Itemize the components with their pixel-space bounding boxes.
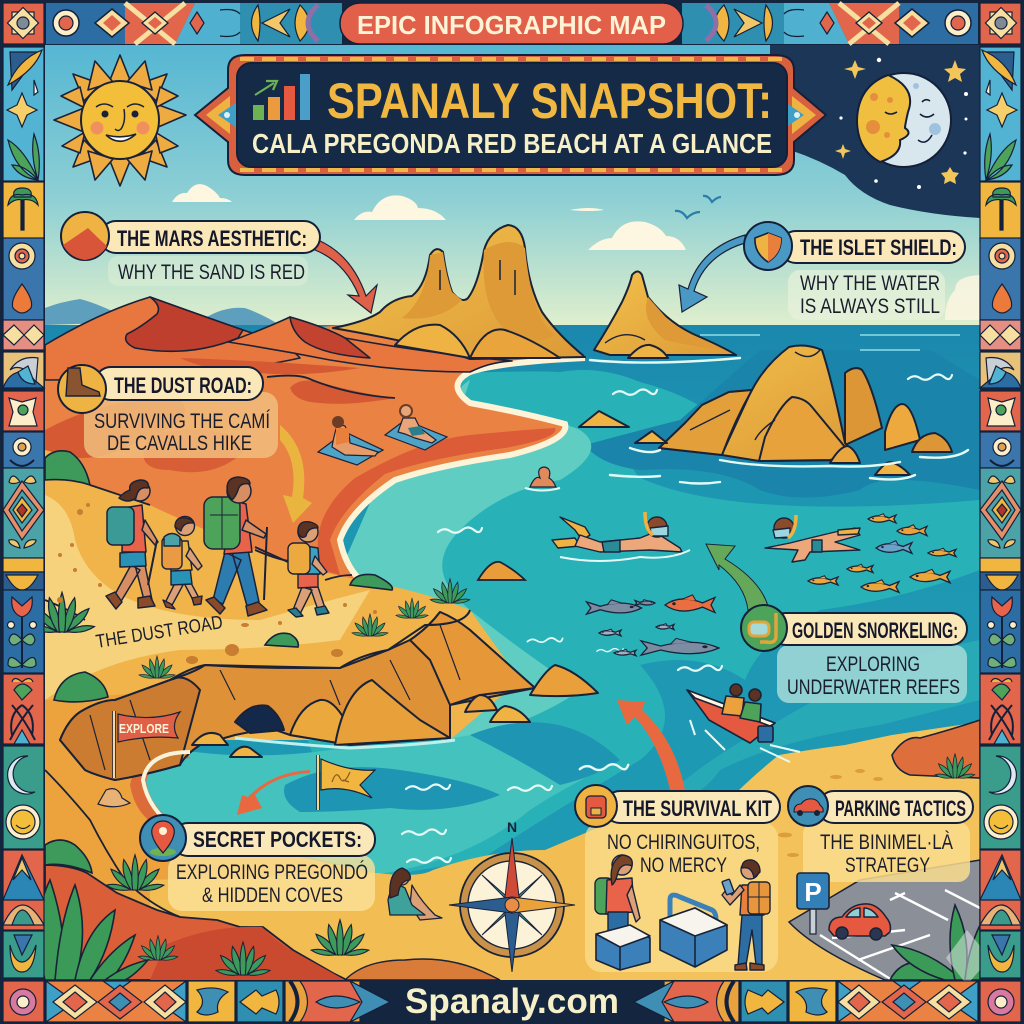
parking panel [803, 822, 970, 882]
survival heading: THE SURVIVAL KIT [623, 796, 772, 821]
turquoise shallows [300, 370, 980, 880]
rock formation: middle islet [594, 272, 736, 358]
secret pockets panel [168, 855, 375, 911]
sparkle watermark [946, 930, 990, 985]
islet subtext line one: WHY THE WATER [800, 272, 940, 295]
snorkeler one [552, 512, 690, 561]
icon: red dune [61, 212, 109, 260]
red dunes [45, 297, 512, 380]
asphalt car park [789, 860, 980, 980]
parking subtext line one: THE BINIMEL·LÀ [820, 831, 953, 854]
label: the mars aesthetic [61, 212, 320, 284]
label: the islet shield [744, 222, 965, 318]
hiker: man [204, 477, 288, 616]
mars panel [108, 256, 308, 286]
secret pockets subtext line two: & HIDDEN COVES [202, 884, 343, 907]
icon: hiking boot [58, 365, 106, 413]
orange beach [45, 300, 585, 640]
flag: explore: EXPLORE [119, 721, 169, 736]
parked car [829, 904, 890, 940]
sun hat on beach [98, 789, 130, 807]
clouds [172, 184, 980, 320]
agave plants [30, 579, 975, 975]
hiker: child one [162, 516, 202, 609]
dust road subtext line two: DE CAVALLS HIKE [107, 432, 252, 455]
small sea rock [478, 562, 525, 580]
red headland right [892, 720, 980, 778]
arrow: dust road [280, 425, 312, 523]
compass rose [449, 819, 575, 972]
lagoon foam [143, 752, 190, 830]
icon: map pin [140, 815, 186, 861]
arrow: islet shield [679, 235, 745, 312]
deep water patch around islets [585, 350, 980, 498]
footer url: Spanaly.com [405, 982, 619, 1021]
sunbather man [385, 405, 447, 450]
fish and sharks left [586, 595, 719, 656]
dust road subtext line one: SURVIVING THE CAMÍ [94, 410, 270, 433]
title line one: SPANALY SNAPSHOT: [327, 73, 772, 129]
border: bottom strip right half [634, 981, 1021, 1022]
sea ripples [402, 335, 960, 863]
title line two: CALA PREGONDA RED BEACH AT A GLANCE [252, 128, 772, 159]
sand mound bottom [345, 959, 500, 980]
border: right column [980, 47, 1021, 978]
coast shelf edge [170, 610, 470, 680]
big leaves bottom-left [39, 880, 148, 980]
border: top strip right half [682, 3, 978, 44]
beach sitter [388, 868, 442, 920]
big leaves bottom-right [890, 905, 980, 980]
lagoon channel right [470, 722, 620, 785]
mars subtext: WHY THE SAND IS RED [118, 261, 305, 284]
icon: smiling sun [54, 55, 186, 186]
parking sign [797, 873, 829, 934]
parking bay lines [820, 890, 980, 980]
title plaque [195, 55, 826, 175]
parking subtext line two: STRATEGY [845, 854, 930, 877]
hiker: woman [106, 480, 158, 609]
land ridge line [45, 485, 352, 620]
wet sand edge [340, 358, 585, 580]
dune shadows [45, 358, 395, 472]
label: parking tactics [788, 786, 973, 877]
flag: explore [114, 711, 180, 778]
text: the dust road path label: THE DUST ROAD [94, 612, 224, 653]
cove sand left [45, 690, 380, 980]
left coast line [45, 770, 180, 917]
person with phone [722, 860, 770, 970]
red earth mound [150, 927, 345, 980]
icon: sleeping moon [857, 73, 951, 167]
dust road panel [84, 392, 278, 458]
snorkeler two [765, 515, 860, 562]
arrow: survival kit [617, 700, 685, 790]
secret pockets subtext line one: EXPLORING PREGONDÓ [176, 861, 368, 884]
birds [675, 196, 721, 218]
fish school right [808, 514, 956, 592]
sand lower right [600, 722, 980, 980]
green bushes [45, 451, 392, 873]
arrow: mars to rocks [315, 240, 377, 313]
mars heading: THE MARS AESTHETIC: [117, 226, 307, 251]
yellow dust road land [45, 450, 520, 740]
label: the dust road [58, 365, 270, 455]
label: the survival kit [575, 785, 780, 877]
islet shield panel [788, 270, 945, 320]
night sky corner [770, 45, 980, 218]
icon: backpack [575, 785, 617, 827]
cliff foot foam [235, 738, 455, 748]
cliffs [60, 612, 598, 780]
banner text: EPIC INFOGRAPHIC MAP [357, 10, 666, 40]
border: corner tile top-right [980, 3, 1021, 44]
snorkeling panel [777, 645, 967, 703]
snorkeling subtext line one: EXPLORING [826, 653, 920, 676]
banner: epic infographic map [340, 3, 683, 44]
arrow: golden snorkeling [706, 544, 768, 610]
lagoon lower-left [140, 722, 620, 874]
distant hills [45, 299, 280, 330]
red earth bottom-left [45, 865, 347, 980]
cooler large [660, 895, 727, 967]
lagoon red sand rim [130, 752, 190, 828]
sand dabs [778, 769, 883, 857]
border: left column [3, 47, 44, 978]
flag: yellow pennant [318, 755, 375, 810]
border: bottom strip left half [3, 981, 390, 1022]
compass north letter: N [507, 819, 517, 835]
parking sign: P [804, 877, 822, 907]
hiker: child two [288, 522, 329, 617]
border: corner tile top-left [3, 3, 44, 44]
rock formation: large islet [579, 346, 952, 475]
border: top strip left half [46, 3, 342, 44]
sand lower centre [150, 810, 720, 980]
dune ridge line [267, 376, 395, 398]
arrow: secret pockets [237, 770, 310, 815]
sea [45, 325, 980, 980]
dust road trail [45, 495, 370, 700]
boat [687, 684, 800, 762]
stars [835, 58, 968, 189]
label: golden snorkeling [741, 605, 967, 699]
icon: shield [744, 222, 792, 270]
snorkeling subtext line two: UNDERWATER REEFS [787, 676, 960, 699]
icon: car [788, 786, 828, 826]
shore shallows [345, 380, 591, 745]
survival subtext line one: NO CHIRINGUITOS, [607, 831, 760, 854]
islet heading: THE ISLET SHIELD: [800, 235, 957, 260]
cooler small [596, 925, 650, 970]
turquoise foreshore right [640, 640, 980, 820]
icon: snorkel mask [741, 605, 787, 651]
icon: bar chart with arrow [253, 74, 310, 120]
survival subtext line two: NO MERCY [640, 854, 727, 877]
cooler and kit panel [585, 822, 778, 972]
lagoon dark patch [284, 767, 500, 812]
label: secret pockets [140, 815, 375, 907]
sunbather woman [318, 416, 383, 465]
path pebbles [57, 503, 377, 664]
red wet sand band [318, 428, 555, 575]
dust road heading: THE DUST ROAD: [114, 373, 252, 398]
person with backpack [595, 855, 640, 945]
rock formation: twin spires [333, 225, 585, 359]
swimmer in bay [525, 467, 560, 490]
foam around islets [590, 358, 968, 484]
islet subtext line two: IS ALWAYS STILL [800, 295, 940, 318]
secret pockets heading: SECRET POCKETS: [193, 827, 362, 852]
sky [45, 45, 980, 330]
